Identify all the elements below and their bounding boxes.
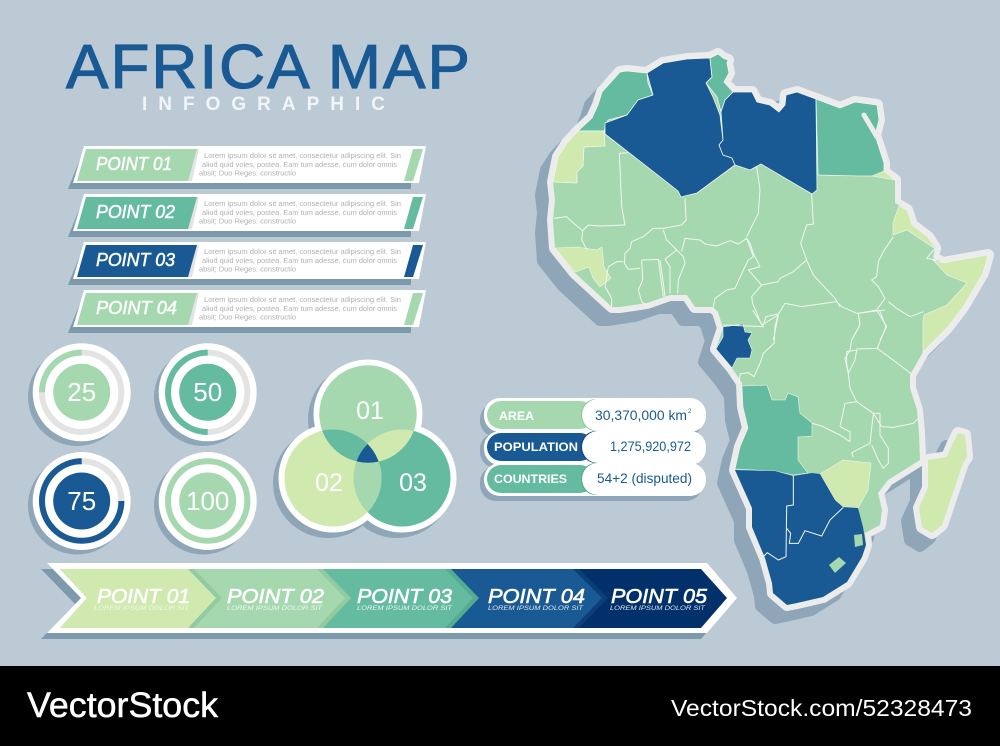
venn diagram: 03	[399, 469, 427, 497]
row: point 04: Lorem ipsum dolor sit amet, consectetur adipiscing elit. Sin	[204, 295, 401, 304]
subtitle: INFOGRAPHIC	[142, 94, 396, 115]
progress circle 50: 50	[193, 377, 222, 407]
progress circle 75	[28, 452, 131, 554]
row: point 02: POINT 02	[96, 202, 175, 222]
stat: population	[487, 431, 706, 463]
stat: area: 30,370,000 km	[595, 408, 687, 423]
venn diagram: 01	[356, 397, 384, 425]
footer bar	[0, 666, 1000, 746]
arrow segment 2: POINT 02	[227, 586, 324, 608]
continent base	[553, 54, 988, 605]
row: point 04	[68, 290, 426, 333]
progress circle 100	[154, 452, 257, 554]
countries: north africa	[553, 54, 884, 197]
row: point 02: absit; Duo Reges: constructio	[199, 216, 296, 226]
progress circle 25	[28, 343, 131, 446]
arrow segment 5: POINT 05	[611, 586, 708, 608]
panel: process arrow	[41, 563, 737, 639]
arrow segment 3	[317, 569, 473, 628]
northern country borders	[554, 153, 937, 340]
progress circle 25: 25	[67, 377, 96, 407]
stat: population: 1,275,920,972	[610, 439, 691, 454]
arrow segment 1: LOREM IPSUM DOLOR SIT	[94, 605, 190, 612]
arrow segment 2: LOREM IPSUM DOLOR SIT	[227, 605, 323, 612]
row: point 03: aliud quid voles, postea. Eam tum adesse, cum dolor omnis	[202, 256, 397, 265]
arrow segment 4	[445, 569, 602, 628]
progress circle 50	[154, 343, 257, 446]
countries: gabon and angola	[716, 324, 812, 475]
row: point 03: POINT 03	[96, 250, 175, 270]
row: point 03: absit; Duo Reges: constructio	[199, 264, 296, 274]
row: point 01: absit; Duo Reges: constructio	[199, 168, 296, 178]
title: AFRICA MAP	[66, 33, 472, 102]
arrow segment 5: LOREM IPSUM DOLOR SIT	[610, 605, 706, 612]
row: point 01: Lorem ipsum dolor sit amet, consectetur adipiscing elit. Sin	[204, 151, 401, 160]
countries: southern africa	[735, 470, 866, 605]
row: point 03: Lorem ipsum dolor sit amet, consectetur adipiscing elit. Sin	[204, 247, 401, 256]
stat: countries: 54+2 (disputed)	[597, 471, 692, 486]
countries: lesotho and eswatini	[829, 534, 863, 573]
arrow segment 1: POINT 01	[97, 586, 190, 608]
row: point 03	[68, 242, 426, 285]
row: point 04: aliud quid voles, postea. Eam tum adesse, cum dolor omnis	[202, 304, 397, 313]
progress circle 100: 100	[186, 486, 229, 516]
footer url text: VectorStock.com/52328473	[671, 695, 972, 721]
venn diagram	[273, 360, 456, 538]
arrow segment 1	[60, 569, 216, 628]
arrow segment 4: LOREM IPSUM DOLOR SIT	[488, 605, 584, 612]
stat: countries	[487, 463, 706, 495]
countries: pale east and west	[555, 171, 988, 508]
map shadow	[541, 67, 976, 618]
gulf of suez	[864, 115, 877, 137]
row: point 04: POINT 04	[96, 298, 177, 318]
panel: progress circles	[28, 343, 257, 554]
row: point 02	[68, 194, 426, 237]
stat: countries: COUNTRIES	[494, 474, 567, 486]
arrow segment 3: LOREM IPSUM DOLOR SIT	[357, 605, 453, 612]
venn diagram: 02	[315, 469, 343, 497]
southern country borders	[723, 302, 918, 560]
arrow segment 2	[188, 569, 345, 628]
map of africa	[541, 54, 988, 618]
arrow segment 5	[573, 569, 727, 628]
row: point 01: POINT 01	[96, 154, 172, 174]
row: point 02: aliud quid voles, postea. Eam tum adesse, cum dolor omnis	[202, 208, 397, 217]
row: point 01: aliud quid voles, postea. Eam tum adesse, cum dolor omnis	[202, 160, 397, 169]
panel: point list	[68, 146, 426, 333]
stat: area: AREA	[499, 411, 534, 423]
row: point 04: absit; Duo Reges: constructio	[199, 312, 296, 322]
progress circle 75: 75	[67, 486, 96, 516]
stat: population: POPULATION	[494, 442, 578, 454]
madagascar	[919, 433, 967, 533]
panel: africa statistics	[480, 398, 706, 501]
arrow segment 4: POINT 04	[488, 586, 585, 608]
row: point 01	[68, 146, 426, 189]
footer logo text: VectorStock	[27, 686, 219, 725]
stat: area	[487, 399, 706, 431]
stat: area: 2	[688, 409, 692, 415]
row: point 02: Lorem ipsum dolor sit amet, consectetur adipiscing elit. Sin	[204, 199, 401, 208]
arrow segment 3: POINT 03	[357, 586, 452, 608]
